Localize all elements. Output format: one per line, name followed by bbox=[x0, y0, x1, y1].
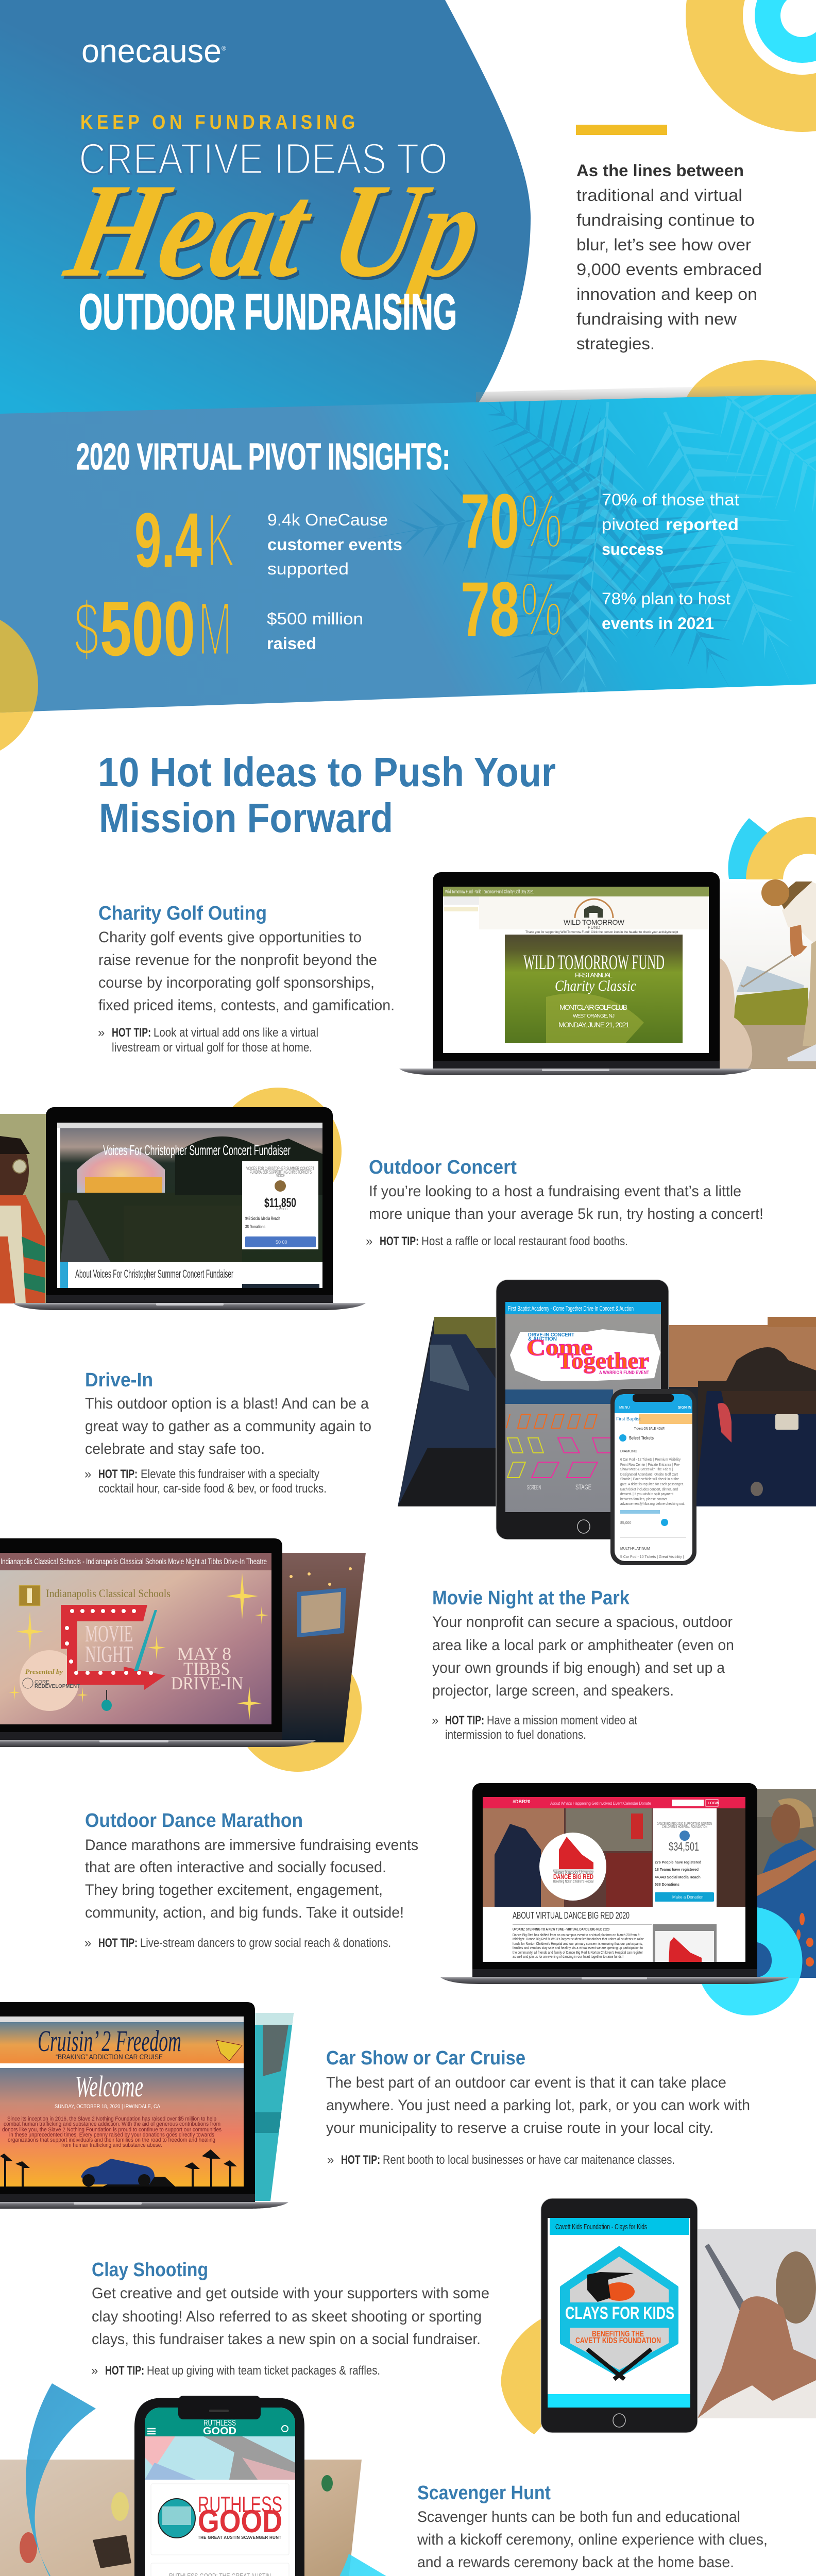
phone: ticket page: between families, please contact bbox=[620, 1498, 667, 1501]
body text: that are often interactive and socially focused. bbox=[85, 1859, 386, 1876]
stat text: raised bbox=[267, 609, 363, 653]
hot tip: HOT TIP: bbox=[112, 1026, 151, 1040]
hero title: Heat Up: Heat Up bbox=[54, 156, 495, 305]
phone: ticket page: MENU bbox=[619, 1406, 630, 1410]
laptop: Wild Tomorrow Fund: FIRST ANNUAL bbox=[575, 971, 613, 979]
body text: more unique than your average 5k run, try hosting a concert! bbox=[369, 1206, 763, 1223]
phone: ticket page: Shuttle | Each vehicle will check in at the bbox=[620, 1478, 679, 1481]
body text: your own grounds if big enough) and set up a bbox=[432, 1659, 725, 1676]
hero title line one: CREATIVE IDEAS TO bbox=[79, 134, 448, 183]
body text: They bring together excitement, engagement, bbox=[85, 1882, 383, 1899]
title: Drive-In bbox=[85, 1369, 153, 1391]
stat text: success: 70% of those that bbox=[602, 490, 739, 509]
hot tip bbox=[366, 1234, 628, 1248]
body text: fixed priced items, contests, and gamification. bbox=[98, 997, 395, 1014]
laptop: movie night site bbox=[0, 1538, 316, 1747]
laptop: Cruisin 2 Freedom: Cruisin’ 2 Freedom bbox=[38, 2024, 181, 2058]
hot tip bbox=[432, 1714, 637, 1742]
badge: Clays for Kids: BENEFITING THE bbox=[592, 2330, 644, 2338]
hot tip: » bbox=[84, 1467, 91, 1481]
laptop: Voices For Christopher: 50 00 bbox=[276, 1240, 287, 1245]
laptop: Voices For Christopher: RAISED bbox=[276, 1208, 288, 1211]
intro paragraph: As the lines between bbox=[576, 161, 744, 180]
phone: ticket page: advancement@hfba.org before checking out. bbox=[620, 1502, 685, 1506]
tablet: Come Together site: & AUCTION bbox=[528, 1336, 557, 1342]
stat text: events: supported bbox=[267, 560, 349, 578]
stat text: success: pivoted bbox=[602, 515, 659, 534]
laptop: Cruisin 2 Freedom: “BRAKING” ADDICTION CAR CRUISE bbox=[56, 2053, 163, 2061]
phone: ticket page: DIAMOND bbox=[620, 1450, 637, 1453]
badge: Clays for Kids: CAVETT KIDS FOUNDATION bbox=[575, 2336, 661, 2345]
logo: onecause: ® bbox=[222, 45, 226, 52]
body text: Charity golf events give opportunities to bbox=[98, 929, 362, 946]
laptop: movie night site: MAY 8 bbox=[177, 1643, 231, 1664]
main heading: Mission Forward bbox=[99, 795, 393, 841]
laptop: Dance Big Red: UPDATE: STEPPING TO A NEW TUNE - VIRTUAL DANCE BIG RED 2020 bbox=[513, 1928, 609, 1931]
laptop: Dance Big Red: #DBR20 bbox=[513, 1799, 531, 1804]
body text: anywhere. You just need a parking lot, park, or you can work with bbox=[326, 2097, 750, 2114]
intro paragraph: strategies. bbox=[576, 334, 655, 353]
body text: clays, this fundraiser takes a new spin on a social fundraiser. bbox=[92, 2331, 481, 2348]
decorative blue arc bbox=[26, 2383, 390, 2576]
intro paragraph: innovation and keep on bbox=[576, 285, 757, 303]
stat: $500M: 500 bbox=[100, 585, 195, 672]
phone: ticket page: $5,000 bbox=[620, 1521, 632, 1525]
hot tip: » bbox=[84, 1936, 91, 1950]
heading: 2020 VIRTUAL PIVOT INSIGHTS: bbox=[76, 436, 450, 478]
body text: clay shooting! Also referred to as skeet shooting or sporting bbox=[92, 2308, 482, 2325]
hot tip: Rent booth to local businesses or have car maitenance classes. bbox=[383, 2153, 675, 2167]
hero eyebrow: KEEP ON FUNDRAISING bbox=[80, 111, 359, 133]
decorative cyan circle bbox=[697, 1907, 802, 2015]
laptop: Voices For Christopher: FUNDRAISER SUPPORTING CHRISTOPHER'S bbox=[250, 1170, 312, 1175]
laptop: Wild Tomorrow Fund: Thank you for supporting Wild Tomorrow Fund! bbox=[525, 931, 590, 934]
title: Movie Night at the Park bbox=[432, 1587, 630, 1609]
laptop: Cruisin 2 Freedom: Welcome bbox=[75, 2070, 143, 2103]
decorative arcs bbox=[728, 817, 816, 879]
hot tip: » bbox=[91, 2364, 98, 2378]
laptop: Wild Tomorrow Fund: Wild Tomorrow Fund - Wild Tomorrow Fund Charity Golf Day 2021 bbox=[445, 889, 534, 895]
title: Clay Shooting bbox=[92, 2259, 208, 2281]
laptop: Cruisin 2 Freedom: donors like you, the Slave 2 Nothing Foundation is proud to continue to support our communities bbox=[2, 2127, 222, 2133]
hero small yellow semicircle bbox=[684, 360, 816, 403]
laptop: Dance Big Red: About What's Happening Get Involved Event Calendar Donate bbox=[550, 1801, 652, 1806]
body text: raise revenue for the nonprofit beyond the bbox=[98, 952, 377, 969]
photo: teal classic car bbox=[255, 2013, 296, 2201]
hot tip: » bbox=[366, 1234, 372, 1248]
section: Movie Night at the Park bbox=[0, 1538, 734, 1772]
phone: ticket page: Tickets ON SALE NOW!! bbox=[634, 1427, 665, 1431]
laptop: Cruisin 2 Freedom: organizations that support individuals and their families on the road to freedom and healing bbox=[8, 2137, 215, 2143]
section: Clay Shooting bbox=[91, 2198, 816, 2434]
photo: map with pins bbox=[0, 2460, 362, 2576]
laptop: Cruisin 2 Freedom: from human trafficking and substance abuse. bbox=[61, 2142, 162, 2148]
section: Charity Golf Outing bbox=[98, 817, 816, 1075]
photo: outdoor movie bbox=[282, 1553, 370, 1742]
laptop: Dance Big Red: DANCE BIG RED 2020 SUPPORTING NORTON bbox=[657, 1822, 712, 1826]
laptop: Voices For Christopher: About Voices For Christopher Summer Concert Fundaiser bbox=[75, 1267, 233, 1280]
main heading: 10 Hot Ideas to Push Your bbox=[98, 749, 556, 795]
stat: 70%: % bbox=[520, 478, 563, 564]
laptop: Dance Big Red: the community, all friends and family of Dance Big Red & Norton Children's Hospital can register bbox=[513, 1951, 643, 1955]
hot tip: Elevate this fundraiser with a specialty bbox=[141, 1467, 319, 1481]
hot tip: Live-stream dancers to grow social reach & donations. bbox=[140, 1936, 391, 1950]
body text: Dance marathons are immersive fundraising events bbox=[85, 1837, 418, 1854]
laptop: Cruisin 2 Freedom bbox=[0, 2002, 288, 2209]
hot tip: Heat up giving with team ticket packages & raffles. bbox=[147, 2364, 380, 2378]
panel: 2020 virtual pivot insights bbox=[0, 394, 816, 713]
photo: smiling man bbox=[0, 1114, 49, 1303]
laptop: Wild Tomorrow Fund: WILD TOMORROW FUND bbox=[523, 951, 665, 974]
phone: ticket page: 6 Car Pod - 12 Tickets | Premium Visibility bbox=[620, 1458, 681, 1462]
logo: onecause: onecause bbox=[81, 32, 222, 70]
phone: ticket page: First Baptist bbox=[616, 1416, 641, 1421]
hot tip: HOT TIP: bbox=[98, 1936, 138, 1950]
laptop: Voices For Christopher: 948 Social Media Reach bbox=[245, 1216, 280, 1221]
laptop: Dance Big Red: 44,443 Social Media Reach bbox=[655, 1876, 701, 1879]
laptop: Voices For Christopher: VOICE bbox=[276, 1173, 285, 1178]
body text: Get creative and get outside with your supporters with some bbox=[92, 2285, 489, 2302]
laptop: Wild Tomorrow Fund: WEST ORANGE, NJ bbox=[573, 1013, 615, 1019]
body text: your municipality to reserve a cruise route in your local city. bbox=[326, 2120, 713, 2137]
left yellow circle behind stats band bbox=[0, 620, 38, 751]
tablet: Come Together site: STAGE bbox=[575, 1483, 591, 1491]
body text: course by incorporating golf sponsorships, bbox=[98, 974, 375, 991]
stat: 9.4K: K bbox=[206, 497, 235, 583]
laptop: Dance Big Red: 276 People have registered bbox=[655, 1861, 701, 1865]
stat text: events in 2021: events in 2021 bbox=[602, 614, 714, 633]
hot tip: » bbox=[432, 1714, 438, 1727]
stat text: events: customer events bbox=[267, 535, 402, 554]
laptop: Voices For Christopher: Voices For Christopher Summer Concert Fundaiser bbox=[103, 1142, 291, 1158]
title: Car Show or Car Cruise bbox=[326, 2047, 525, 2069]
hot tip: HOT TIP: bbox=[380, 1234, 419, 1248]
phone: Ruthless Good site: RUTHLESS bbox=[198, 2492, 282, 2517]
laptop: Wild Tomorrow Fund bbox=[399, 872, 752, 1075]
laptop: movie night site: Presented by bbox=[25, 1668, 63, 1675]
phone: ticket page: Each ticket includes concert, dinner, and bbox=[620, 1488, 678, 1492]
body text: The best part of an outdoor car event is that it can take place bbox=[326, 2074, 726, 2091]
phone: ticket page: gate. A ticket is required for each passenger. bbox=[620, 1483, 684, 1486]
decorative yellow circle bbox=[234, 1644, 362, 1772]
hot tip: » bbox=[98, 1026, 105, 1040]
phone: ticket page: Select Tickets bbox=[629, 1435, 654, 1440]
body text bbox=[85, 1395, 371, 1458]
stat: 78%: 78 bbox=[461, 566, 519, 652]
laptop: Dance Big Red bbox=[440, 1783, 789, 1984]
laptop: Dance Big Red: Western Kentucky University bbox=[553, 1870, 593, 1875]
laptop: Cruisin 2 Freedom: SUNDAY, OCTOBER 18, 2020 | IRWINDALE, CA bbox=[55, 2104, 161, 2110]
hot tip: HOT TIP: bbox=[98, 1467, 138, 1481]
laptop: Wild Tomorrow Fund: Charity Classic bbox=[555, 977, 636, 994]
phone: Ruthless Good site: THE GREAT AUSTIN SCAVENGER HUNT bbox=[198, 2535, 281, 2540]
tablet: Come Together site: Come bbox=[526, 1335, 592, 1360]
laptop: Dance Big Red: funds for Norton Children's Hospital and our primary concern is ensuring that our participants, bbox=[513, 1942, 643, 1946]
laptop: Dance Big Red: Dance Big Red has shifted from an on campus event to a virtual platform on March 20 from 5- bbox=[513, 1934, 641, 1937]
body text bbox=[85, 1837, 418, 1921]
body text: area like a local park or amphitheater (even on bbox=[432, 1637, 734, 1654]
hot tip: Host a raffle or local restaurant food booths. bbox=[421, 1234, 628, 1248]
hot tip: Have a mission moment video at bbox=[487, 1714, 637, 1727]
body text: with a kickoff ceremony, online experience with clues, bbox=[417, 2531, 768, 2548]
title: Charity Golf Outing bbox=[98, 903, 267, 924]
laptop: Wild Tomorrow Fund: WILD TOMORROW bbox=[564, 918, 625, 926]
laptop: Voices For Christopher: VOICES FOR CHRISTOPHER SUMMER CONCERT bbox=[246, 1166, 314, 1171]
laptop: Wild Tomorrow Fund: FUND bbox=[588, 925, 600, 930]
phone: ticket page: MULTI-PLATINUM bbox=[620, 1547, 650, 1551]
phone: ticket page: 5 Car Pod - 10 Tickets | Great Visibility | bbox=[620, 1555, 684, 1559]
main heading bbox=[98, 749, 556, 841]
stat text: events in 2021 bbox=[602, 589, 730, 633]
intro paragraph bbox=[576, 161, 762, 353]
laptop: movie night site: DRIVE-IN bbox=[171, 1673, 243, 1693]
phone: ticket page: Show Meet & Greet with The Fab 5 | bbox=[620, 1468, 673, 1471]
laptop: Dance Big Red: Make a Donation bbox=[672, 1895, 703, 1900]
photo: clay shooter bbox=[698, 2229, 816, 2418]
laptop: Wild Tomorrow Fund: Click the person icon in the header to check your activity/receipt bbox=[591, 931, 678, 934]
stat text: raised: $500 million bbox=[267, 609, 363, 628]
photo: cars at drive-in bbox=[398, 1317, 816, 1506]
body text bbox=[326, 2074, 750, 2137]
laptop: Dance Big Red: families and vendors stay safe and healthy. As a virtual event we are opening up participation to bbox=[513, 1946, 643, 1950]
stat text: success: reported bbox=[666, 515, 739, 534]
laptop: Voices For Christopher: $11,850 bbox=[264, 1196, 296, 1210]
hero title: Heat Up: Heat Up bbox=[56, 159, 497, 308]
laptop: Dance Big Red: 538 Donations bbox=[655, 1883, 679, 1887]
tablet: Come Together site bbox=[496, 1280, 669, 1539]
stat text: events bbox=[267, 511, 402, 578]
body text: and a rewards ceremony back at the home base. bbox=[417, 2554, 734, 2571]
body text: projector, large screen, and speakers. bbox=[432, 1682, 674, 1699]
intro paragraph: blur, let’s see how over bbox=[576, 235, 751, 254]
hot tip: Look at virtual add ons like a virtual bbox=[154, 1026, 318, 1040]
title: Outdoor Dance Marathon bbox=[85, 1810, 303, 1832]
tablet: Come Together site: DRIVE-IN CONCERT bbox=[528, 1332, 574, 1338]
stat: 9.4K: 9.4 bbox=[134, 497, 202, 583]
laptop: Cruisin 2 Freedom: in these unprecedented times. Every penny raised by your donations goes directly towards bbox=[9, 2132, 214, 2138]
laptop: movie night site: MOVIE bbox=[85, 1620, 133, 1647]
hero title line three: OUTDOOR FUNDRAISING bbox=[79, 283, 457, 340]
intro accent bar bbox=[576, 125, 667, 135]
intro paragraph: fundraising continue to bbox=[576, 211, 755, 229]
hot tip: intermission to fuel donations. bbox=[445, 1728, 586, 1742]
laptop: Wild Tomorrow Fund: MONTCLAIR GOLF CLUB bbox=[559, 1003, 627, 1011]
stat: 78%: % bbox=[520, 566, 563, 652]
laptop: movie night site: CORE bbox=[35, 1680, 49, 1685]
hot tip: livestream or virtual golf for those at home. bbox=[112, 1041, 312, 1055]
hero decorative target circles bbox=[686, 0, 816, 132]
section: Outdoor Concert bbox=[0, 1088, 763, 1310]
body text: celebrate and stay safe too. bbox=[85, 1440, 265, 1458]
body text bbox=[92, 2285, 489, 2348]
stat text: events: 9.4k OneCause bbox=[267, 511, 388, 529]
body text: community, action, and big funds. Take it outside! bbox=[85, 1904, 404, 1921]
intro paragraph: fundraising with new bbox=[576, 310, 737, 328]
stat: $500M: $ bbox=[74, 585, 99, 672]
laptop: Cruisin 2 Freedom: Since its inception in 2016, the Slave 2 Nothing Foundation has raised over $5 million to help bbox=[7, 2116, 216, 2122]
tablet: Come Together site: SCREEN bbox=[527, 1484, 541, 1491]
laptop: movie night site: NIGHT bbox=[85, 1641, 133, 1667]
intro paragraph: 9,000 events embraced bbox=[576, 260, 762, 279]
laptop: Dance Big Red: ABOUT VIRTUAL DANCE BIG RED 2020 bbox=[513, 1910, 630, 1921]
stat: $500M: M bbox=[198, 585, 232, 672]
stat text: events in 2021: 78% plan to host bbox=[602, 589, 730, 608]
body text bbox=[98, 929, 395, 1014]
hot tip: HOT TIP: bbox=[105, 2364, 144, 2378]
body text: This outdoor option is a blast! And can be a bbox=[85, 1395, 369, 1412]
laptop: movie night site: Indianapolis Classical Schools - Indianapolis Classical Schools Movie Night at Tibbs Drive-In Theatre bbox=[1, 1557, 267, 1566]
badge: Clays for Kids bbox=[562, 2248, 676, 2379]
body text bbox=[369, 1183, 763, 1223]
phone: ticket page: SIGN IN bbox=[678, 1406, 691, 1410]
body text: Scavenger hunts can be both fun and educational bbox=[417, 2509, 740, 2526]
decorative yellow arc bbox=[501, 2319, 546, 2434]
hot tip bbox=[84, 1467, 327, 1496]
stat text: success bbox=[602, 490, 739, 558]
body text bbox=[417, 2509, 768, 2571]
laptop: Dance Big Red: 18 Teams have registered bbox=[655, 1868, 699, 1872]
stats band shadow bbox=[476, 384, 816, 402]
hot tip: HOT TIP: bbox=[341, 2153, 380, 2167]
tablet: Come Together site: A WARRIOR FUND EVENT bbox=[599, 1370, 649, 1375]
laptop: Dance Big Red: as well and join us for an evening of dancing in our heart together to raise funds!! bbox=[513, 1955, 623, 1959]
hot tip: cocktail hour, car-side food & bev, or food trucks. bbox=[98, 1482, 327, 1496]
stat text: raised: raised bbox=[267, 634, 316, 653]
photo: woman dancing bbox=[757, 1789, 816, 1978]
laptop: Wild Tomorrow Fund: MONDAY, JUNE 21, 2021 bbox=[558, 1021, 630, 1029]
laptop: Dance Big Red: $34,501 bbox=[669, 1840, 699, 1853]
phone: Ruthless Good site: GOOD bbox=[203, 2426, 236, 2437]
phone: ticket page: dessert. | If you wish to split payment bbox=[620, 1493, 673, 1496]
tablet: Clays for Kids: Cavett Kids Foundation - Clays for Kids bbox=[555, 2223, 647, 2231]
intro paragraph: traditional and virtual bbox=[576, 186, 742, 205]
hot tip bbox=[98, 1026, 318, 1055]
laptop: Voices For Christopher: 38 Donations bbox=[245, 1224, 265, 1229]
stat text: success: success bbox=[602, 540, 664, 558]
hot tip: HOT TIP: bbox=[445, 1714, 484, 1727]
laptop: Voices For Christopher bbox=[13, 1107, 366, 1310]
title: Outdoor Concert bbox=[369, 1157, 517, 1178]
photo: golfer bbox=[720, 879, 816, 1069]
hero panel: blue curved background bbox=[0, 0, 531, 420]
laptop: Dance Big Red: Midnight. Dance Big Red is WKU's largest student led fundraiser that unites all students to raise bbox=[513, 1938, 644, 1941]
stat: 70%: 70 bbox=[461, 478, 519, 564]
laptop: Dance Big Red: DANCE BIG RED bbox=[553, 1873, 593, 1880]
hot tip: » bbox=[327, 2153, 334, 2167]
tablet: Come Together site: First Baptist Academy - Come Together Drive-In Concert & Auction bbox=[508, 1304, 634, 1312]
section: Outdoor Dance Marathon bbox=[84, 1783, 816, 2015]
laptop: movie night site: Indianapolis Classical Schools bbox=[46, 1587, 171, 1600]
badge: Clays for Kids: CLAYS FOR KIDS bbox=[565, 2303, 674, 2323]
decorative yellow circle bbox=[215, 1088, 342, 1214]
phone: Ruthless Good site: GOOD bbox=[198, 2504, 282, 2539]
phone: ticket page: Designated Attendant | Onsite Golf Cart bbox=[620, 1473, 678, 1477]
body text: great way to gather as a community again to bbox=[85, 1418, 371, 1435]
tablet: Come Together site: Together bbox=[557, 1348, 649, 1374]
body text bbox=[432, 1614, 734, 1699]
phone: Ruthless Good site: RUTHLESS bbox=[203, 2419, 236, 2428]
section: Car Show or Car Cruise bbox=[0, 2002, 750, 2209]
laptop: Dance Big Red: CHILDREN'S HOSPITAL FOUNDATION bbox=[662, 1825, 707, 1829]
phone: ticket page: Front Row Center | Private Entrance | Pre- bbox=[620, 1463, 681, 1467]
laptop: Dance Big Red: Benefiting Norton Children's Hospital bbox=[553, 1880, 593, 1884]
phone: ticket page bbox=[610, 1389, 696, 1565]
body text: Your nonprofit can secure a spacious, outdoor bbox=[432, 1614, 733, 1631]
phone: Ruthless Good site bbox=[134, 2396, 304, 2576]
tablet: Clays for Kids bbox=[541, 2198, 698, 2433]
section: Drive-In bbox=[84, 1280, 816, 1565]
laptop: Cruisin 2 Freedom: combat human trafficking and substance addiction. With the aid of generous contributions from bbox=[4, 2121, 220, 2127]
body text: If you’re looking to a host a fundraising event that’s a little bbox=[369, 1183, 741, 1200]
section: Scavenger Hunt bbox=[0, 2383, 768, 2576]
laptop: movie night site: REDEVELOPMENT bbox=[35, 1684, 80, 1689]
laptop: movie night site: TIBBS bbox=[183, 1658, 230, 1679]
title: Scavenger Hunt bbox=[417, 2482, 551, 2504]
laptop: Dance Big Red: LOGIN bbox=[708, 1802, 719, 1805]
